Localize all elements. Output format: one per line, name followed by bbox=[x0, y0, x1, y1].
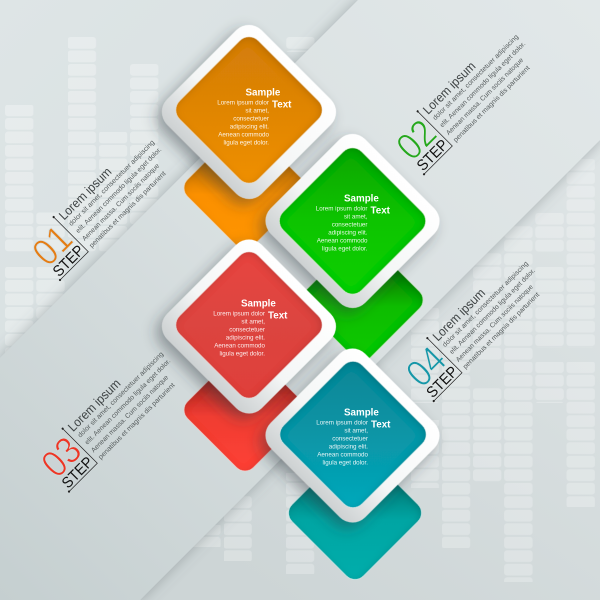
text: orange diamond: consectetuer bbox=[233, 116, 269, 122]
step 01 label: dolor sit amet, consectetuer adipiscing bbox=[68, 139, 156, 228]
equalizer bars: lower right bbox=[140, 140, 600, 600]
panel: red diamond bbox=[155, 232, 343, 421]
panel: orange diamond bbox=[155, 18, 343, 206]
step 04 label: elit. Aenean commodo ligula eget dolor. bbox=[449, 267, 537, 356]
step 01 label: penatibus et magnis dis parturient bbox=[88, 170, 168, 250]
step 04 label: penatibus et magnis dis parturient bbox=[462, 291, 541, 371]
text: green diamond: Text bbox=[370, 206, 391, 216]
step 01 label: STEP bbox=[50, 242, 88, 280]
text: teal diamond: ligula eget dolor. bbox=[322, 460, 368, 466]
text: orange diamond: Text bbox=[272, 100, 292, 110]
step 01 label: Aenean massa. Cum sociis natoque bbox=[81, 162, 161, 243]
lower swatch: orange bbox=[179, 122, 311, 254]
text: teal diamond: Aenean commodo bbox=[317, 452, 369, 458]
step 01 label: Lorem ipsum bbox=[56, 164, 114, 223]
text: red diamond: sit amet, bbox=[241, 318, 265, 326]
step 03 label: Aenean massa. Cum sociis natoque bbox=[90, 374, 170, 454]
step 04 label: Lorem ipsum bbox=[429, 285, 488, 344]
step 04 label: Aenean massa. Cum sociis natoque bbox=[455, 284, 535, 364]
text: orange diamond: Sample bbox=[246, 88, 281, 98]
text: red diamond: adipiscing elit. bbox=[226, 334, 265, 342]
step 04 label bbox=[397, 249, 551, 403]
text: red diamond bbox=[213, 298, 288, 358]
text: green diamond: ligula eget dolor. bbox=[322, 246, 368, 252]
text: orange diamond: ligula eget dolor. bbox=[223, 140, 269, 146]
text: green diamond: Aenean commodo bbox=[317, 238, 368, 244]
text: teal diamond: consectetuer bbox=[332, 436, 368, 442]
step 02 label bbox=[387, 22, 542, 176]
text: teal diamond: Lorem ipsum dolor bbox=[316, 420, 368, 426]
text: teal diamond: Sample bbox=[344, 408, 379, 418]
equalizer bars: upper left bbox=[5, 37, 314, 367]
step 01 label bbox=[23, 128, 178, 282]
text: orange diamond: adipiscing elit. bbox=[230, 124, 269, 130]
panel: teal diamond bbox=[258, 341, 447, 530]
step 03 label: penatibus et magnis dis parturient bbox=[97, 382, 177, 461]
text: teal diamond: adipiscing elit. bbox=[329, 444, 368, 450]
text: teal diamond: sit amet, bbox=[344, 428, 368, 434]
step 01 label: elit. Aenean commodo ligula eget dolor. bbox=[75, 146, 163, 235]
step 02 label: penatibus et magnis dis parturient bbox=[452, 65, 532, 144]
text: green diamond: consectetuer bbox=[332, 222, 368, 228]
text: orange diamond: sit amet, bbox=[245, 108, 269, 114]
text: red diamond: consectetuer bbox=[229, 326, 265, 334]
text: orange diamond: Lorem ipsum dolor bbox=[217, 100, 269, 106]
step 03 label: dolor sit amet, consectetuer adipiscing bbox=[77, 351, 165, 439]
text: teal diamond: Text bbox=[371, 420, 391, 430]
text: red diamond: Sample bbox=[241, 298, 276, 310]
text: red diamond: Lorem ipsum dolor bbox=[213, 310, 265, 318]
step 04 label: dolor sit amet, consectetuer adipiscing bbox=[441, 260, 530, 349]
text: green diamond: Sample bbox=[344, 194, 379, 204]
text: orange diamond bbox=[217, 88, 292, 146]
step 02 label: Aenean massa. Cum sociis natoque bbox=[445, 57, 525, 137]
text: orange diamond: Aenean commodo bbox=[218, 132, 270, 138]
text: green diamond bbox=[316, 194, 391, 252]
step 03 label: Lorem ipsum bbox=[65, 376, 123, 434]
step 02 label: elit. Aenean commodo ligula eget dolor. bbox=[439, 41, 527, 129]
panel: green diamond bbox=[258, 127, 447, 315]
text: red diamond: Text bbox=[268, 310, 288, 322]
step 02 label: STEP bbox=[414, 136, 452, 175]
text: green diamond: Lorem ipsum dolor bbox=[316, 206, 368, 212]
step 03 label: STEP bbox=[59, 454, 97, 492]
step 01 label: 01 bbox=[25, 218, 81, 274]
step 03 label: 03 bbox=[34, 429, 90, 486]
text: green diamond: adipiscing elit. bbox=[328, 230, 368, 236]
lower swatch: teal bbox=[284, 442, 426, 584]
text: green diamond: sit amet, bbox=[344, 214, 368, 220]
step 04 label: STEP bbox=[423, 363, 462, 401]
step 02 label: dolor sit amet, consectetuer adipiscing bbox=[432, 33, 520, 122]
lower swatch: green bbox=[296, 234, 428, 366]
step 03 label: elit. Aenean commodo ligula eget dolor. bbox=[84, 358, 172, 446]
step 04 label: 04 bbox=[398, 339, 455, 395]
text: red diamond: ligula eget dolor. bbox=[219, 350, 265, 358]
lower swatch: red bbox=[179, 344, 311, 476]
step 03 label bbox=[32, 339, 187, 494]
step 02 label: Lorem ipsum bbox=[420, 58, 478, 117]
text: teal diamond bbox=[316, 408, 391, 466]
step 02 label: 02 bbox=[389, 112, 445, 169]
text: red diamond: Aenean commodo bbox=[214, 342, 266, 350]
